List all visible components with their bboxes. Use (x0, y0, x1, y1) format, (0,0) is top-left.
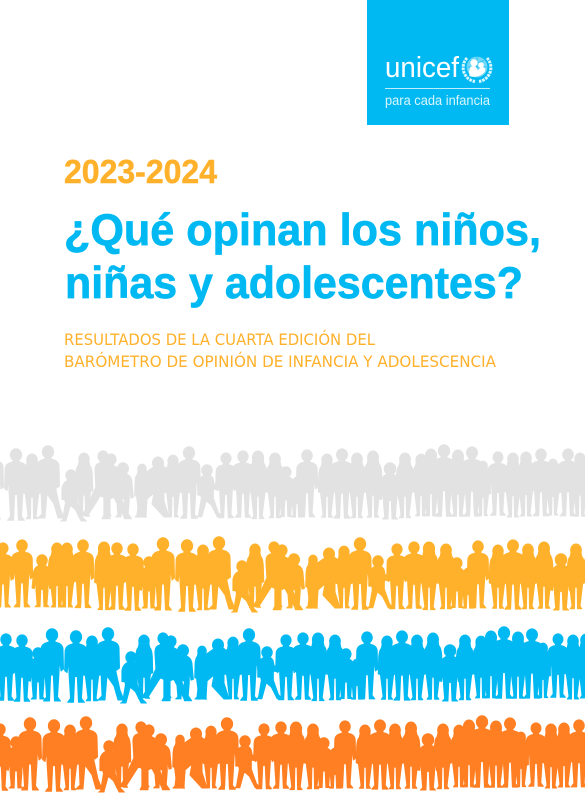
crowd silhouette row: grey (0, 444, 585, 522)
main title: ¿Qué opinan los niños, (64, 206, 541, 255)
subtitle (64, 330, 496, 371)
divider line (385, 88, 490, 89)
logo wordmark: unicef: unicef (385, 52, 460, 84)
year heading: 2023-2024 (64, 153, 218, 190)
main title: niñas y adolescentes? (65, 259, 523, 308)
crowd silhouette row: blue (0, 626, 585, 704)
heading text block (64, 153, 541, 371)
logo tagline: para cada infancia (385, 93, 490, 108)
subtitle: RESULTADOS DE LA CUARTA EDICIÓN DEL (64, 330, 375, 349)
logo panel: unicef para cada infancia (367, 0, 509, 125)
crowd silhouette row: yellow-orange (0, 536, 585, 612)
icon: unicef emblem (463, 57, 491, 82)
crowd silhouette row: orange (0, 715, 585, 792)
main title (64, 206, 541, 308)
subtitle: BARÓMETRO DE OPINIÓN DE INFANCIA Y ADOLESCENCIA (64, 352, 496, 371)
